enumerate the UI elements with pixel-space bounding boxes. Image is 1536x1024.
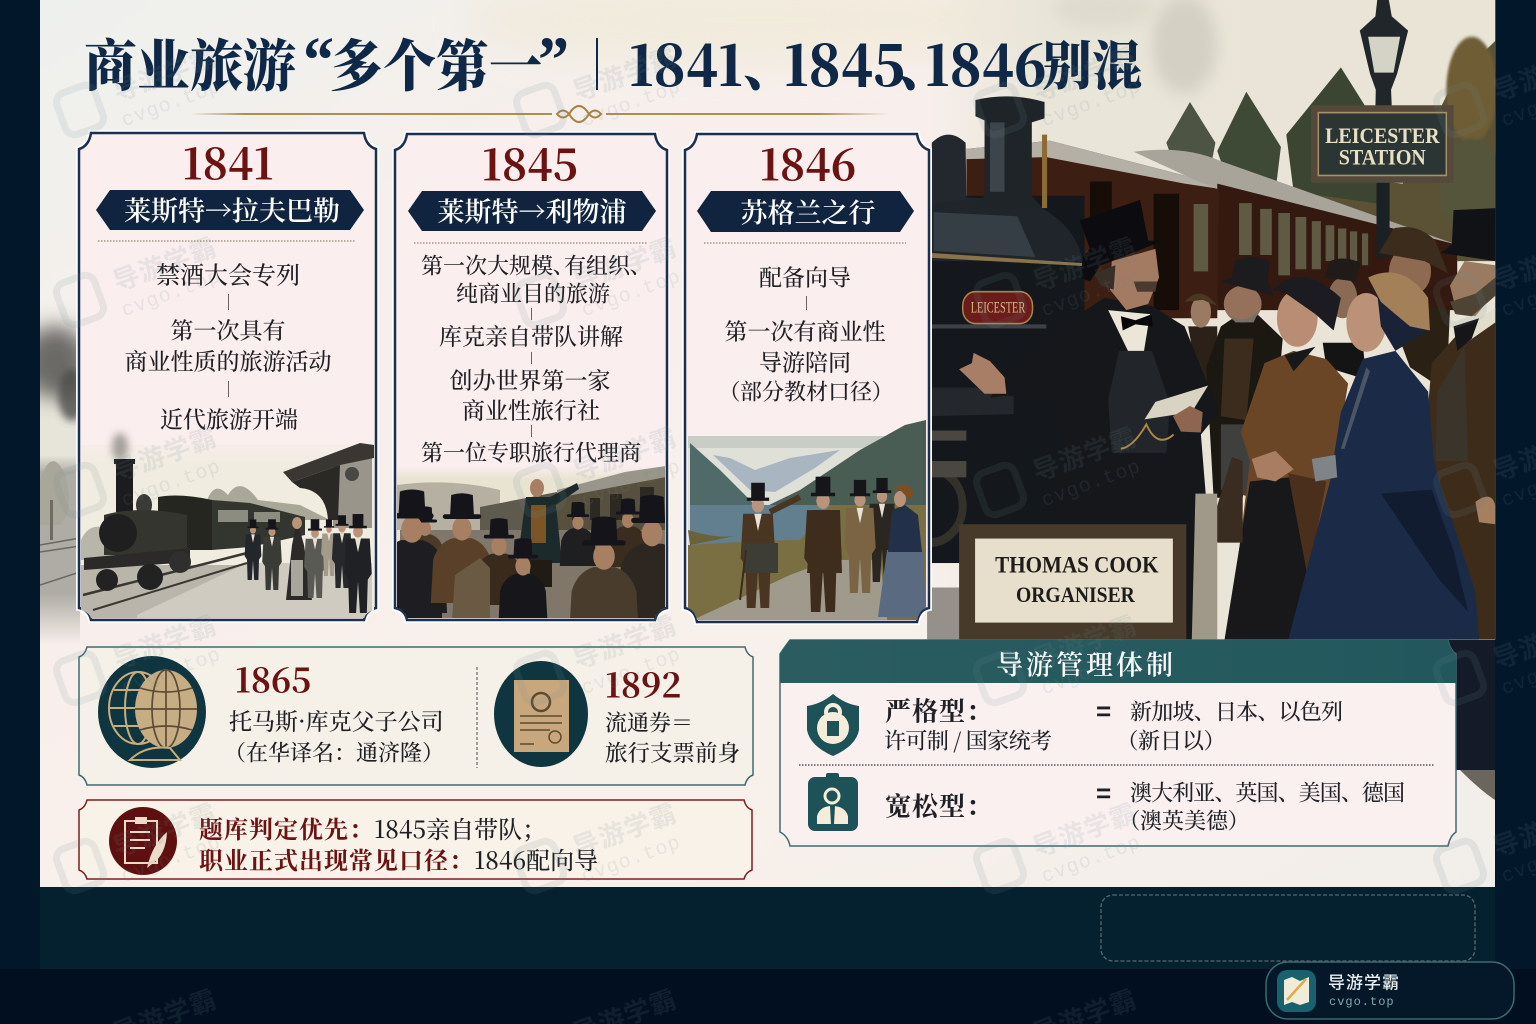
text block: loose type: = (1096, 778, 1111, 808)
text block: 1846 facts: 配备向导 (759, 260, 851, 292)
watermark grid: 导游学霸 (107, 793, 221, 865)
text block: callout: 题库判定优先：1845亲自带队； (199, 810, 546, 844)
watermark grid: 导游学霸 (567, 417, 681, 489)
text block: strict type: 严格型： (885, 692, 993, 728)
title: 1845 (784, 21, 906, 103)
watermark grid: cvgo.top (579, 456, 684, 513)
text block: 1865: 托马斯·库克父子公司 (229, 704, 444, 736)
trees and hillside (1166, 37, 1504, 261)
watermark grid: cvgo.top (119, 266, 224, 323)
title divider (596, 38, 598, 90)
text block: 1892: 旅行支票前身 (605, 736, 740, 768)
text block: 1865: （在华译名：通济隆） (224, 736, 444, 768)
text block: 1841 facts: 第一次具有 (170, 312, 286, 346)
watermark grid: cvgo.top (119, 456, 224, 513)
text block: 1846 facts: （部分教材口径） (729, 376, 883, 406)
sign: Thomas Cook organiser (959, 524, 1186, 640)
illustration: 1841 train at station (81, 432, 374, 620)
banner: route 1845: 莱斯特→利物浦 (438, 190, 626, 230)
banner: route 1841: 莱斯特→拉夫巴勒 (124, 190, 340, 228)
station lamp and sign: STATION (1339, 144, 1426, 170)
panel: guide management systems (780, 640, 1456, 846)
text block: callout (199, 810, 598, 876)
watermark grid: cvgo.top (1039, 832, 1144, 889)
station lamp and sign: LEICESTER (1325, 123, 1440, 148)
watermark grid: cvgo.top (1039, 456, 1144, 513)
text block: 1846 facts: 导游陪同 (759, 344, 851, 378)
watermark grid: cvgo.top (1039, 266, 1144, 323)
title: “ (303, 23, 334, 96)
illustration: 1845 guided crowd (397, 466, 665, 618)
sign: Thomas Cook organiser: THOMAS COOK (995, 551, 1159, 578)
text block: 1845 facts: 商业性旅行社 (462, 392, 600, 426)
watermark grid: cvgo.top (579, 76, 684, 133)
icon: brand map (1277, 970, 1316, 1012)
heading: guide system: 导游管理体制 (996, 644, 1176, 682)
watermark grid: 导游学霸 (1027, 37, 1141, 109)
watermark grid: 导游学霸 (567, 605, 681, 677)
locomotive (932, 96, 1084, 564)
watermark grid: 导游学霸 (1027, 605, 1141, 677)
text block: loose type (885, 776, 1405, 836)
text block: callout: 职业正式出现常见口径：1846配向导 (199, 840, 598, 876)
watermark grid: cvgo.top (1039, 76, 1144, 133)
text block: 1865: 1865 (235, 654, 311, 702)
panel: 1841 (79, 132, 376, 620)
bearded man right (1424, 208, 1495, 640)
title: 、 (743, 21, 796, 103)
icon: globe (98, 656, 206, 768)
text block: 1841 facts: 禁酒大会专列 (156, 256, 300, 290)
watermark grid: 导游学霸 (107, 37, 221, 109)
watermark grid: cvgo.top (119, 832, 224, 889)
text block: 1841 facts: 近代旅游开端 (160, 402, 298, 434)
watermark grid: cvgo.top (579, 644, 684, 701)
text block: 1846 facts (724, 260, 886, 406)
text block: strict type: 许可制 / 国家统考 (884, 724, 1052, 756)
watermark grid: 导游学霸 (1027, 227, 1141, 299)
left edge smoke and landscape (40, 312, 80, 640)
title ornament rule (190, 106, 890, 122)
sign: Thomas Cook organiser: ORGANISER (1016, 582, 1136, 608)
text block: 1845 facts: 纯商业目的旅游 (456, 278, 610, 308)
woman in brown (1214, 277, 1348, 640)
text block: loose type: 澳大利亚、英国、美国、德国 (1130, 776, 1405, 808)
carriages (966, 141, 1457, 318)
icon: travel document (494, 661, 588, 767)
text block: 1892: 1892 (605, 658, 682, 708)
background passengers (1185, 227, 1450, 498)
text block: 1865 (224, 654, 444, 768)
title: ” (538, 23, 569, 96)
callout: exam judgement (79, 800, 752, 879)
text block: 1892: 流通券＝ (605, 706, 693, 738)
watermark grid: 导游学霸 (567, 793, 681, 865)
platform floor (927, 494, 1217, 640)
brand badge (1266, 962, 1514, 1019)
panel: 1845 (392, 131, 670, 623)
text block: 1841 facts: 商业性质的旅游活动 (124, 344, 332, 376)
locomotive: LEICESTER (971, 300, 1025, 317)
Thomas Cook figure (959, 200, 1219, 640)
woman in navy (1288, 272, 1479, 640)
watermark grid: 导游学霸 (1027, 417, 1141, 489)
title: 商业旅游 (84, 21, 296, 103)
heading: guide system (780, 640, 1456, 683)
text block: 1892 (605, 658, 740, 768)
illustration: 1846 Scotland landscape (688, 420, 928, 626)
banner: route 1846 (697, 191, 914, 232)
watermark grid: 导游学霸 (107, 227, 221, 299)
text block: 1845 facts: 第一位专职旅行代理商 (421, 436, 641, 468)
watermark grid: cvgo.top (1039, 644, 1144, 701)
title: 别混 (1042, 24, 1142, 100)
text block: loose type: （澳英美德） (1129, 804, 1239, 836)
sky and smoke (926, 0, 1495, 640)
title: 多个第一 (330, 21, 542, 103)
text block: strict type: （新日以） (1127, 724, 1215, 756)
watermark grid: 导游学霸 (107, 605, 221, 677)
station lamp and sign (1311, 0, 1454, 257)
brand badge: cvgo.top (1329, 995, 1395, 1009)
text block: 1841 facts (124, 256, 332, 434)
watermark grid: 导游学霸 (107, 417, 221, 489)
panel: 1846 (685, 132, 929, 626)
icon: shield lock (807, 694, 859, 756)
watermark grid: cvgo.top (579, 266, 684, 323)
text block: 1845 facts: 库克亲自带队讲解 (439, 318, 623, 352)
text block: 1846 facts: 第一次有商业性 (724, 314, 886, 346)
text block: strict type (884, 692, 1343, 756)
watermark grid: 导游学霸 (567, 227, 681, 299)
title (84, 21, 1142, 103)
text block: loose type: 宽松型： (885, 786, 993, 824)
text block: strict type: = (1096, 696, 1111, 726)
dress extension right of guide panel (1440, 640, 1495, 800)
heading: 1845: 1845 (482, 132, 578, 194)
title: 1846 (925, 21, 1047, 103)
empty dashed placeholder box (1101, 895, 1475, 961)
text block: 1845 facts: 第一次大规模、有组织、 (421, 250, 641, 280)
title: 1841 (629, 21, 743, 103)
banner: route 1846: 苏格兰之行 (740, 192, 876, 230)
watermark grid: cvgo.top (119, 644, 224, 701)
text block: strict type: 新加坡、日本、以色列 (1130, 696, 1343, 726)
text block: 1845 facts (421, 250, 641, 468)
heading: 1846: 1846 (760, 132, 856, 194)
title: 、 (898, 21, 951, 103)
heading: 1841: 1841 (182, 132, 274, 192)
icon: guide badge (808, 773, 858, 831)
brand badge: 导游学霸 (1328, 968, 1400, 994)
watermark grid: cvgo.top (119, 76, 224, 133)
watermark grid: 导游学霸 (1027, 793, 1141, 865)
watermark grid: cvgo.top (579, 832, 684, 889)
watermark grid: 导游学霸 (567, 37, 681, 109)
text block: 1845 facts: 创办世界第一家 (450, 362, 610, 396)
panel: 1865 and 1892 (79, 647, 753, 785)
icon: clipboard and quill (109, 807, 177, 875)
photo scene: Thomas Cook at Leicester station (897, 0, 1504, 640)
